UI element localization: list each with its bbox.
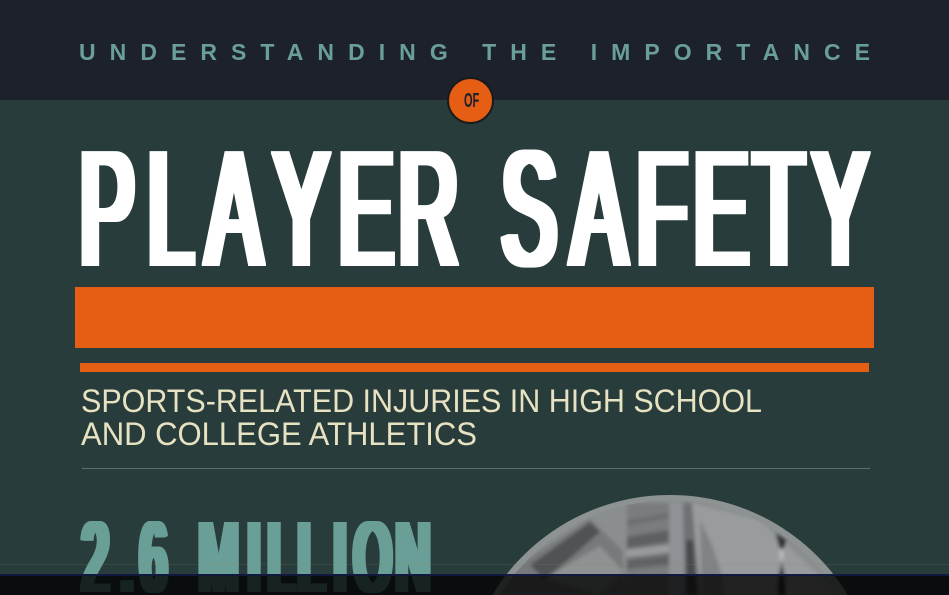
bottom dark overlay bar: [0, 564, 949, 595]
orange bar: thin: [80, 363, 869, 372]
divider line: [82, 468, 870, 469]
subtitle: SPORTS-RELATED INJURIES IN HIGH SCHOOL: [81, 383, 762, 419]
orange bar: wide: [75, 287, 874, 348]
subtitle: [81, 383, 762, 452]
subtitle: AND COLLEGE ATHLETICS: [81, 416, 477, 452]
title: player safety: PLAYER SAFETY: [80, 118, 868, 300]
badge: of: [448, 78, 493, 123]
heading: understanding the importance: UNDERSTANDING THE IMPORTANCE: [79, 39, 870, 65]
top header band: [0, 0, 949, 100]
photo: athlete in circular frame: [490, 495, 850, 595]
badge: of: OF: [464, 90, 479, 112]
